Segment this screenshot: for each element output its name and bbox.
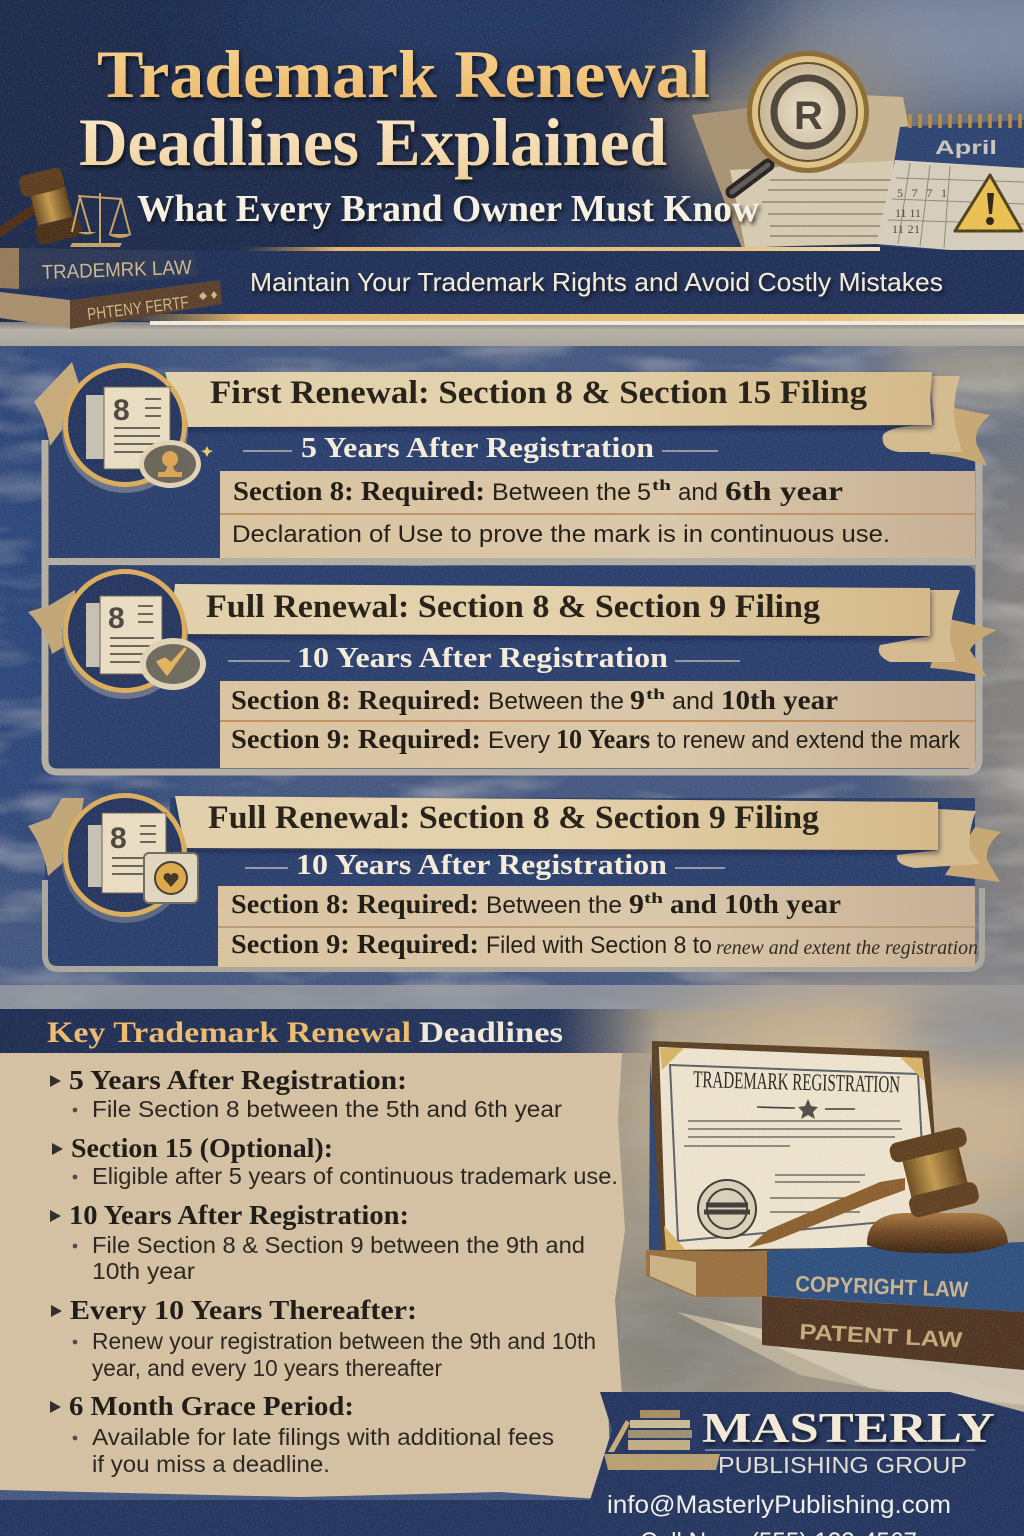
email: info@MasterlyPublishing.com [607, 1491, 951, 1519]
row: section 8: 9 [629, 889, 644, 919]
illustration: law books, top left [0, 248, 222, 329]
parchment rows [220, 681, 975, 768]
illustration: April calendar with warning sign [876, 114, 1024, 256]
row: section 9: renew and extent the registration [716, 937, 978, 959]
illustration: April calendar with warning sign: 11 11 [895, 206, 921, 220]
timing label: 10 Years After Registration [297, 643, 668, 674]
certificate seal [698, 1180, 756, 1238]
row: section 8: Between the [486, 892, 622, 919]
book spine: patent: PHTENY FERTF [86, 293, 190, 324]
row: section 9 [231, 724, 961, 754]
title: Deadlines Explained [79, 104, 667, 180]
list item: grace period: if you miss a deadline. [92, 1451, 330, 1477]
panel: full renewal card, ten years [28, 569, 997, 768]
row: section 9 [231, 929, 978, 959]
list item: ten years: 10 Years After Registration: [69, 1200, 409, 1230]
icon: section 8 document badge with stamp [62, 363, 213, 493]
icon: section 8 document badge with stamp: 8 [113, 394, 130, 427]
timing label: 10 Years After Registration [296, 850, 667, 881]
brand name: MASTERLY [702, 1406, 995, 1452]
heading band: Deadlines [419, 1016, 563, 1049]
list item: section 15: Eligible after 5 years of continuous trademark use. [92, 1163, 618, 1189]
illustration: magnifying glass with registered mark [732, 51, 869, 192]
panel: full renewal card, section 8 and 9 [28, 793, 1001, 969]
row: section 8: and [672, 688, 714, 715]
row: section 9: 10 Years [556, 724, 650, 754]
list item: ten years: 10th year [92, 1258, 195, 1284]
section: key deadlines [0, 1009, 660, 1500]
row: section 9: Section 9: Required: [231, 724, 481, 754]
gold divider band with tagline [0, 247, 1024, 321]
book spine: copyright law: COPYRIGHT LAW [795, 1271, 969, 1302]
timing label: 5 Years After Registration [301, 433, 654, 464]
row: section 8: Between the [488, 688, 624, 715]
panel: first renewal card [34, 362, 990, 558]
row: section 8 [231, 685, 838, 715]
list item: ten years [50, 1200, 585, 1284]
warning triangle [955, 175, 1022, 231]
icon: stack of books [604, 1410, 720, 1470]
list item: every ten years: year, and every 10 years thereafter [92, 1355, 442, 1381]
list item: every ten years: Every 10 Years Thereafter: [70, 1295, 417, 1325]
row: section 8 [231, 889, 841, 919]
tagline: Maintain Your Trademark Rights and Avoid Costly Mistakes [250, 267, 943, 297]
row: section 8: Section 8: Required: [233, 476, 485, 506]
list item: section 15 [52, 1133, 618, 1189]
row: section 9: to renew and extend the mark [657, 727, 961, 754]
row: section 8: 6th year [725, 476, 843, 506]
row: section 8: Section 8: Required: [231, 889, 479, 919]
row: section 8: and 10th year [670, 889, 841, 919]
illustration: gavel and scales, top left [0, 165, 132, 247]
row: section 8 [233, 476, 843, 506]
row: section 8: th [652, 478, 672, 494]
illustration: magnifying glass with registered mark: R [794, 94, 823, 138]
list item: every ten years [51, 1295, 596, 1381]
book spine: patent law: PATENT LAW [799, 1319, 963, 1353]
background texture [0, 346, 1024, 1500]
row: section 9: Section 9: Required: [231, 929, 479, 959]
illustration: law book stack [646, 1242, 1024, 1370]
row: declaration: Declaration of Use to prove the mark is in continuous use. [232, 521, 890, 548]
icon: section 8 document badge with heart seal: 8 [110, 822, 127, 855]
heading band: Key Trademark Renewal [47, 1016, 411, 1049]
illustration: April calendar with warning sign: 5 7 7 1 [897, 186, 947, 200]
book spine: trademark law: TRADEMRK LAW [41, 257, 192, 284]
list item: every ten years: Renew your registration between the 9th and 10th [92, 1328, 596, 1354]
heading: First Renewal: Section 8 & Section 15 Filing [210, 375, 868, 411]
row: section 8: th [644, 891, 664, 907]
parchment rows [218, 886, 975, 967]
footer: masterly publishing group [0, 1392, 1024, 1536]
row: section 8: Between the [492, 479, 631, 506]
row: section 8: 9 [630, 685, 645, 715]
list item: five years: File Section 8 between the 5th and 6th year [92, 1096, 562, 1122]
illustration: scattered papers [677, 1312, 1024, 1420]
row: section 8: th [646, 687, 666, 703]
ribbon [28, 796, 1001, 882]
title: Trademark Renewal [97, 36, 710, 112]
certificate title: TRADEMARK REGISTRATION [693, 1067, 900, 1098]
illustration: April calendar with warning sign: 11 21 [892, 222, 920, 236]
header banner [0, 0, 1024, 322]
heading: Full Renewal: Section 8 & Section 9 Filing [208, 800, 820, 836]
footer: masterly publishing group: PUBLISHING GROUP [718, 1452, 967, 1478]
list item: ten years: File Section 8 & Section 9 between the 9th and [92, 1232, 585, 1258]
list item: grace period: 6 Month Grace Period: [69, 1391, 354, 1421]
row: section 8: and [678, 479, 718, 506]
subtitle: What Every Brand Owner Must Know [137, 188, 760, 230]
list item: five years [50, 1065, 562, 1122]
list item: five years: 5 Years After Registration: [69, 1065, 407, 1095]
icon: section 8 document badge with heart seal [62, 793, 198, 923]
ribbon [34, 362, 990, 466]
calendar month: April [935, 138, 997, 159]
list item: grace period: Available for late filings with additional fees [92, 1424, 554, 1450]
row: section 8: Section 8: Required: [231, 685, 481, 715]
heading band [0, 1009, 660, 1053]
list item: grace period [50, 1391, 554, 1477]
row: section 8: 10th year [721, 685, 838, 715]
panel: first and second renewal frame [45, 425, 979, 772]
illustration: gavel on block [748, 1126, 1008, 1254]
row: section 9: Every [488, 727, 550, 754]
row: section 8: 5 [637, 479, 651, 506]
parchment sheet [0, 1053, 625, 1500]
illustration: document behind magnifier [692, 95, 930, 248]
icon: section 8 document badge with check mark: 8 [108, 602, 125, 635]
ribbon [28, 584, 997, 677]
row: section 9: Filed with Section 8 to [486, 932, 712, 959]
heading: Full Renewal: Section 8 & Section 9 Filing [206, 589, 821, 625]
illustration: trademark registration certificate [649, 1041, 940, 1252]
parchment rows [220, 471, 975, 558]
list item: section 15: Section 15 (Optional): [71, 1133, 333, 1163]
icon: section 8 document badge with check mark [62, 569, 206, 699]
band under header [0, 322, 1024, 346]
title [79, 36, 710, 180]
